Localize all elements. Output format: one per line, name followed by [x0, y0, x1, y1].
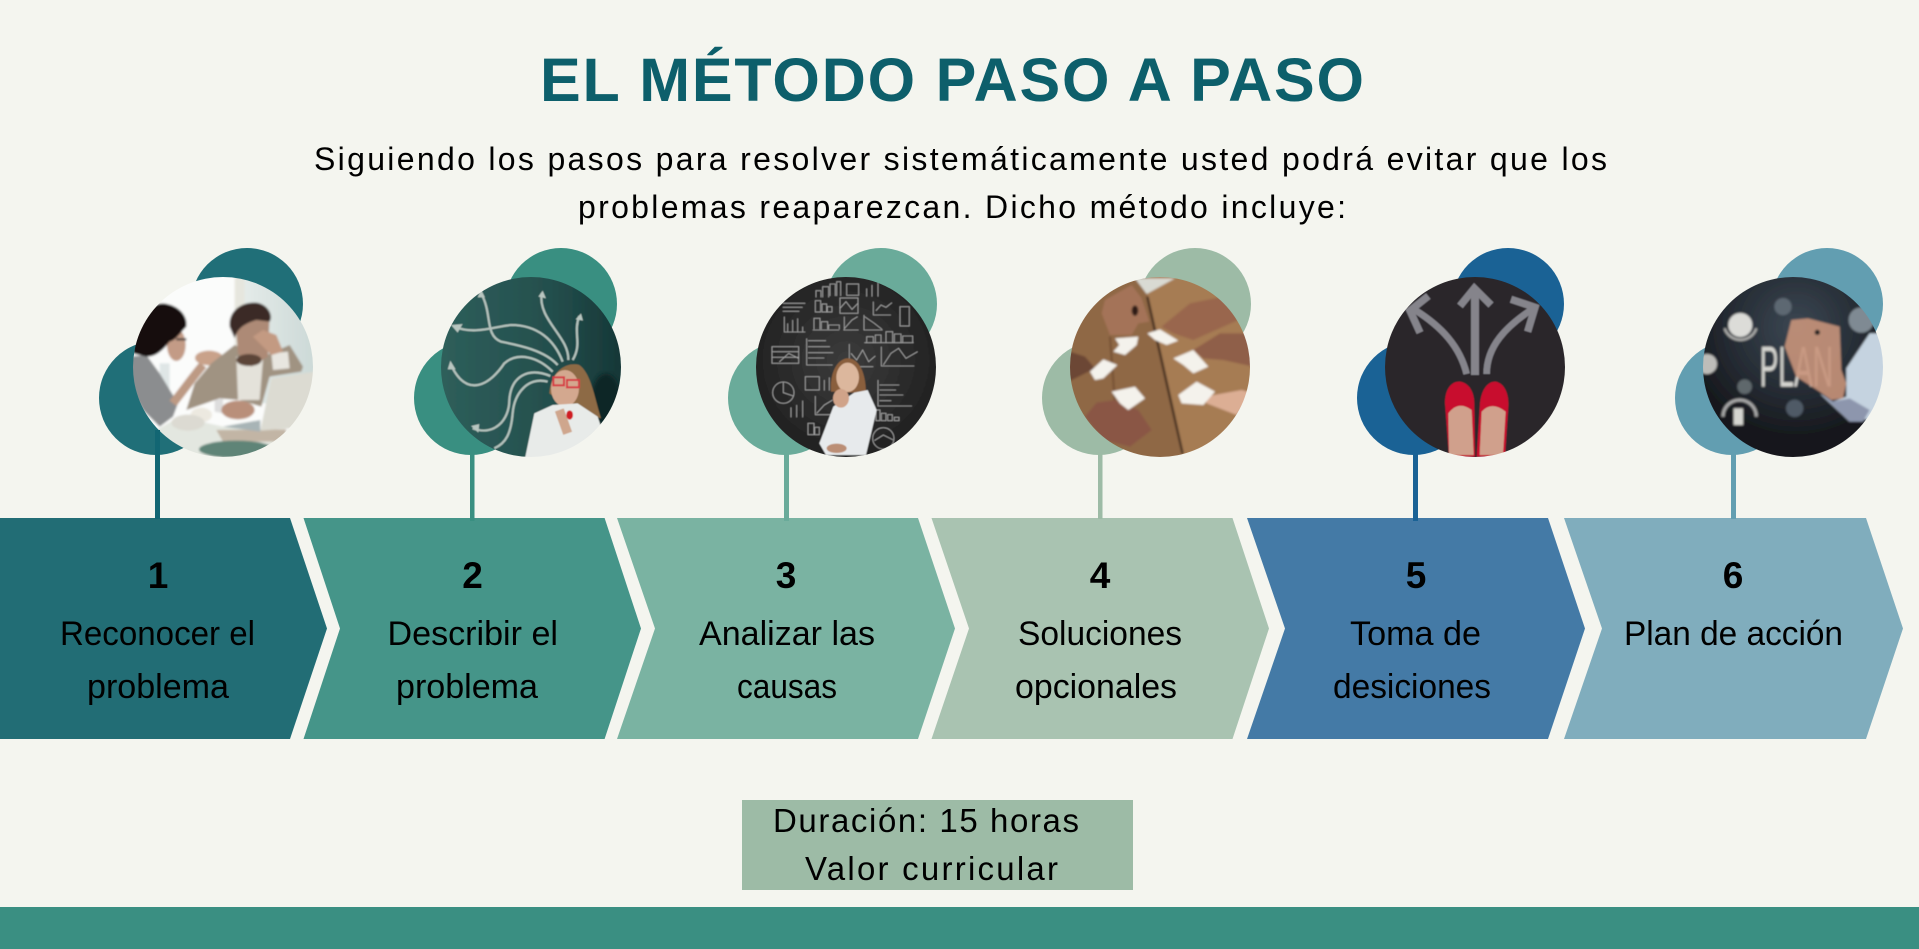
- photo: woman and chalk charts: [756, 277, 936, 457]
- info box: [742, 800, 1133, 890]
- photo: hand writing plan: PLAN: [1760, 336, 1833, 400]
- label 5: [1333, 615, 1491, 706]
- photo: meeting with worried man: [133, 277, 313, 457]
- stem 6: [1731, 452, 1736, 519]
- label 3: [699, 615, 875, 706]
- info box: Duración: 15 horas: [773, 802, 1079, 839]
- label 2: [388, 615, 558, 706]
- label 5: Toma de: [1350, 615, 1481, 653]
- label 6: Plan de acción: [1624, 615, 1843, 653]
- photo: girl with chalk arrows: [441, 277, 621, 457]
- step 6: [1564, 248, 1903, 739]
- chevron 5: [1247, 518, 1585, 739]
- label 2: Describir el: [388, 615, 558, 653]
- chevron 3: [617, 518, 955, 739]
- label 1: [60, 615, 255, 706]
- decorative circles: [1357, 248, 1564, 455]
- info box: Valor curricular: [805, 850, 1058, 887]
- number 1: 1: [148, 555, 168, 596]
- number 3: 3: [776, 555, 796, 596]
- stem 5: [1413, 452, 1418, 521]
- label 5: desiciones: [1333, 668, 1491, 706]
- photo: hands with puzzle pieces: [1070, 277, 1250, 457]
- stem 4: [1098, 452, 1102, 519]
- label 2: problema: [396, 668, 538, 706]
- photo: red shoes and chalk arrows: [1385, 277, 1565, 457]
- label 1: Reconocer el: [60, 615, 255, 653]
- label 4: opcionales: [1015, 668, 1177, 706]
- chevron 1: [0, 518, 327, 739]
- stem 3: [784, 452, 789, 521]
- step 4: [932, 248, 1269, 739]
- step 5: [1247, 248, 1585, 739]
- chevron 4: [932, 518, 1269, 739]
- chevron 2: [304, 518, 641, 739]
- intro text: problemas reaparezcan. Dicho método incluye:: [578, 189, 1346, 225]
- step 1: [0, 248, 327, 739]
- number 5: 5: [1406, 555, 1426, 596]
- stem 2: [470, 452, 474, 521]
- intro text: [314, 141, 1607, 225]
- decorative circles: [1042, 248, 1251, 455]
- decorative circles: [414, 248, 617, 455]
- title: EL MÉTODO PASO A PASO: [540, 46, 1364, 114]
- decorative circles: [728, 248, 937, 455]
- label 3: causas: [737, 668, 837, 706]
- stem 1: [155, 430, 160, 519]
- label 4: Soluciones: [1018, 615, 1182, 653]
- number 6: 6: [1723, 555, 1743, 596]
- label 3: Analizar las: [699, 615, 875, 653]
- label 1: problema: [87, 668, 229, 706]
- decorative circles: [1675, 248, 1883, 455]
- intro text: Siguiendo los pasos para resolver sistemáticamente usted podrá evitar que los: [314, 141, 1607, 177]
- decorative circles: [99, 248, 303, 455]
- photo: hand writing plan: [1703, 277, 1883, 457]
- label 4: [1015, 615, 1182, 706]
- chevron 6: [1564, 518, 1903, 739]
- footer bar: [0, 907, 1919, 949]
- step 3: [617, 248, 955, 739]
- step 2: [304, 248, 641, 739]
- number 4: 4: [1090, 555, 1111, 596]
- number 2: 2: [462, 555, 483, 596]
